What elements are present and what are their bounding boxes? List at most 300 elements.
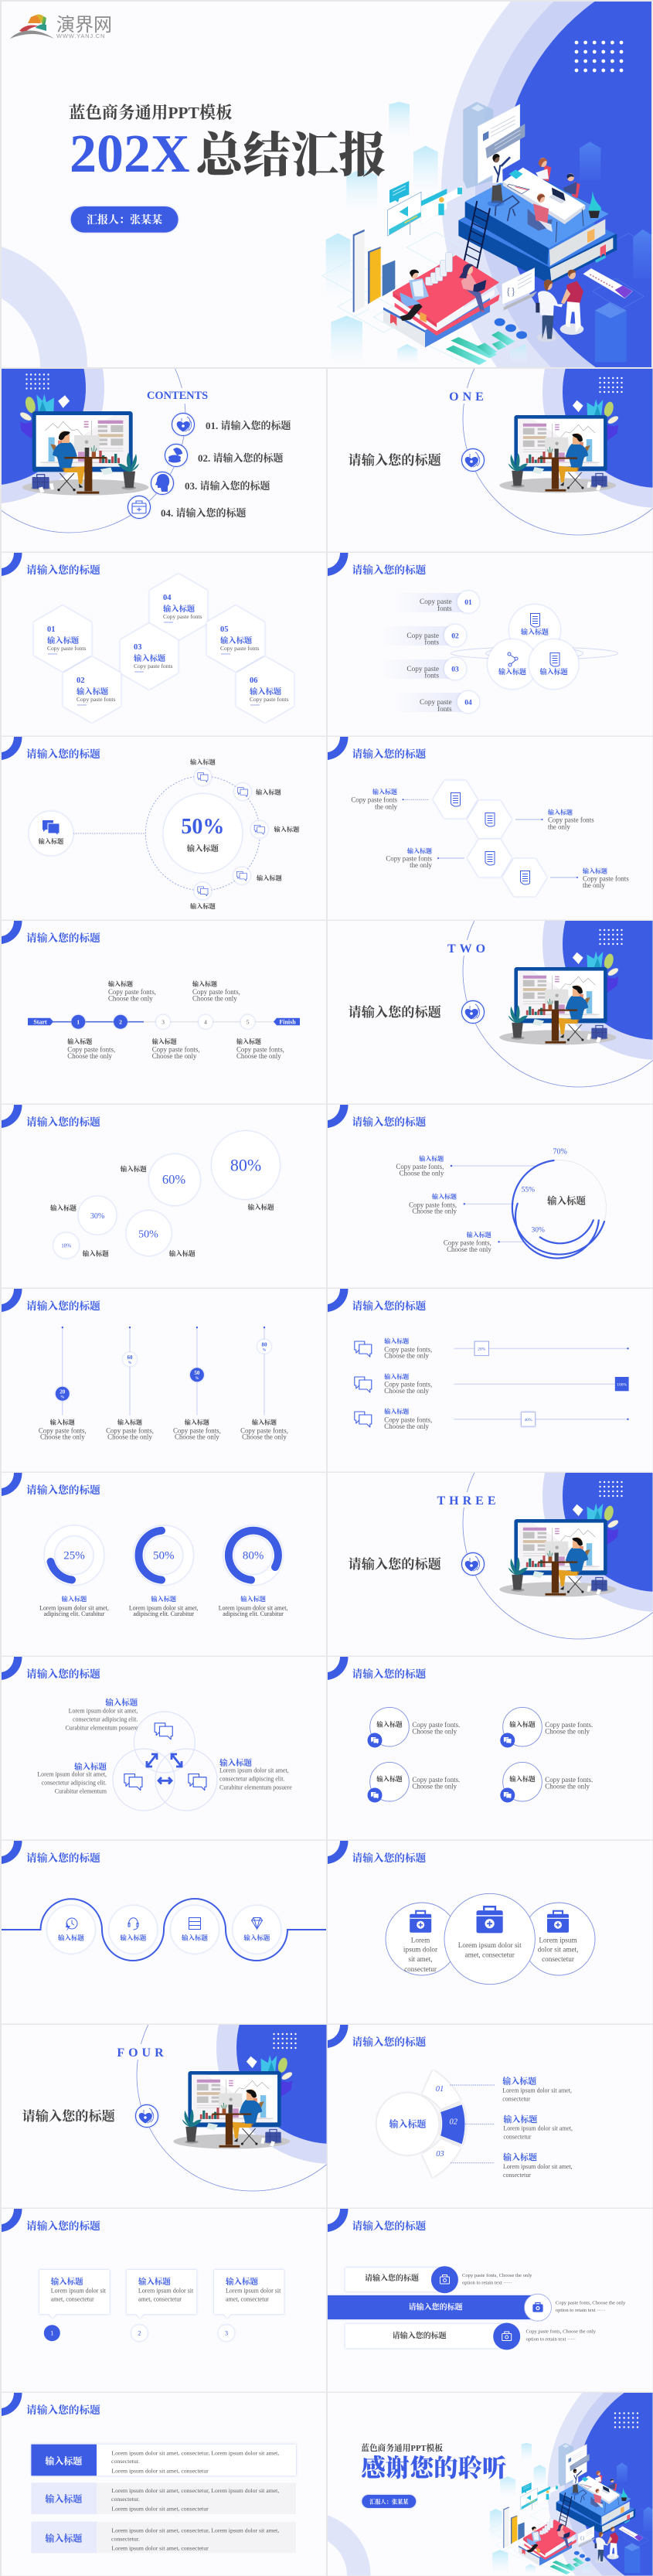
- lower text 1: 输入标题: [67, 1038, 92, 1045]
- slider 80%: [240, 1327, 288, 1441]
- text top: Curabitur elementum posuere: [66, 1725, 138, 1732]
- center circle: 50%: [163, 794, 242, 873]
- text block 70%: 输入标题: [419, 1155, 444, 1163]
- label: ONE: ONE: [449, 390, 488, 404]
- hexagon 04: [151, 575, 206, 639]
- circle right: consectetur: [542, 1955, 574, 1963]
- circle center: [444, 1893, 535, 1985]
- card 3: amet, consectetur: [226, 2296, 269, 2303]
- heading: [2, 921, 100, 944]
- heading: [328, 1289, 427, 1312]
- item bottom right: [500, 1762, 593, 1803]
- step 4: 4: [204, 1019, 207, 1025]
- slider 20%: 输入标题: [50, 1419, 75, 1426]
- center circle: [377, 2093, 439, 2155]
- slide: venn cycle: [2, 1657, 326, 1840]
- card 3: [214, 2270, 284, 2318]
- oval: top: [509, 605, 560, 656]
- slider 60%: 60: [127, 1354, 133, 1361]
- text block 1: [351, 788, 429, 810]
- row 3: Lorem ipsum dolor sit amet, consectetur: [111, 2545, 209, 2552]
- item bottom left: 输入标题: [376, 1775, 403, 1783]
- list item 04: Copy paste: [420, 699, 452, 707]
- step 1: [71, 1015, 85, 1029]
- bubble 50%: 输入标题: [169, 1249, 196, 1257]
- illustration: isometric team on books with blue circles: [2, 2, 651, 367]
- left circle with chat icon: [29, 812, 73, 855]
- node 4: [233, 1906, 281, 1954]
- logo: 演界网: [10, 15, 112, 39]
- lower text 3: Copy paste fonts,: [236, 1045, 284, 1053]
- item bottom left: Copy paste fonts.: [412, 1776, 460, 1784]
- segment 03: 03: [436, 2150, 444, 2159]
- main title: 总结汇报: [196, 130, 386, 182]
- hexagon 03: Copy paste fonts: [134, 663, 172, 670]
- heading: CONTENTS: CONTENTS: [147, 390, 208, 402]
- step 5: 5: [247, 1019, 250, 1025]
- slider 50%: 50: [194, 1370, 200, 1376]
- slider 50%: %: [195, 1377, 199, 1381]
- node 1: [47, 1906, 95, 1954]
- button: reporter: [71, 206, 179, 233]
- oval: left: 输入标题: [498, 667, 526, 676]
- item top right: [500, 1707, 593, 1747]
- heading: [2, 1473, 100, 1496]
- text 01: Lorem ipsum dolor sit amet,: [502, 2087, 572, 2094]
- band 3: option to retain text ·····: [525, 2336, 576, 2342]
- card 1: 输入标题: [51, 2276, 83, 2286]
- slider 20%: Choose the only: [40, 1433, 85, 1441]
- hexagon 02: 输入标题: [77, 687, 109, 697]
- heading: [328, 1841, 427, 1864]
- list item 03: Copy paste: [406, 666, 439, 673]
- main title: 感谢您的聆听: [361, 2454, 506, 2482]
- slide: section THREE: [328, 1380, 653, 1656]
- node upper right: 输入标题: [256, 788, 282, 796]
- list item 02: Copy paste: [406, 632, 439, 640]
- circle right: Lorem ipsum: [539, 1936, 577, 1944]
- item 04: [128, 496, 247, 519]
- node 4: 输入标题: [243, 1934, 270, 1941]
- segment 02: [440, 2104, 465, 2145]
- band 1: Copy paste fonts, Choose the only: [462, 2273, 532, 2278]
- row 2: consectetur.: [111, 2496, 140, 2503]
- slider 60%: Copy paste fonts,: [106, 1426, 154, 1434]
- step 2: 2: [119, 1019, 122, 1025]
- hexagon 05: 05: [220, 625, 229, 634]
- row 2: Lorem ipsum dolor sit amet, consectetur: [111, 2505, 209, 2512]
- heading: 请输入您的标题: [26, 1300, 100, 1312]
- heading: [328, 553, 427, 576]
- donut 50%: Lorem ipsum dolor sit amet,: [129, 1605, 199, 1612]
- text 01: consectetur: [502, 2096, 531, 2103]
- list item 03: [406, 657, 467, 680]
- text top: consectetur adipiscing elit.: [73, 1716, 138, 1723]
- slide: 50% ring: [2, 737, 326, 920]
- icon: heart: [136, 2104, 158, 2128]
- slide: wave: [2, 1841, 326, 2024]
- text top: 输入标题: [105, 1698, 138, 1708]
- band 2: [328, 2294, 626, 2321]
- hexagon 06: 输入标题: [250, 687, 282, 697]
- donut 80%: adipiscing elit. Curabitur: [223, 1610, 284, 1617]
- slide: numbered list with ovals: [328, 553, 652, 736]
- node right: [251, 821, 300, 838]
- row 1: [31, 2445, 296, 2475]
- node lower right: 输入标题: [257, 874, 283, 882]
- hexagon 02: [65, 659, 119, 721]
- text left: consectetur adipiscing elit.: [42, 1780, 107, 1787]
- hexagon 06: Copy paste fonts: [250, 696, 288, 703]
- illustration: section backdrop: [463, 828, 653, 1087]
- hexagon 03: [122, 625, 176, 688]
- step 5: [241, 1015, 255, 1029]
- heading: 请输入您的标题: [352, 2220, 427, 2232]
- bubble 30%: 输入标题: [50, 1205, 77, 1212]
- node bottom: [190, 882, 216, 910]
- lower text 3: Choose the only: [236, 1052, 281, 1060]
- text block 4: the only: [583, 881, 605, 889]
- row 3: consectetur.: [111, 2535, 140, 2542]
- slide: table: [2, 2393, 326, 2576]
- node bottom: 输入标题: [190, 902, 216, 910]
- heading: 请输入您的标题: [26, 748, 100, 760]
- heading: 请输入您的标题: [352, 2036, 427, 2048]
- label: TWO: TWO: [447, 942, 489, 956]
- arc chart: 30%: [532, 1226, 545, 1234]
- step 3: 3: [162, 1019, 165, 1025]
- logo: 演界网: WWW.YANJ.CN: [56, 32, 105, 39]
- row 2: Lorem ipsum dolor sit amet, consectetur, Lorem ipsum dolor sit amet,: [111, 2487, 279, 2494]
- text left: Curabitur elementum: [55, 1787, 107, 1794]
- item bottom right: 输入标题: [509, 1775, 536, 1783]
- slide: concentric arcs: [328, 1105, 652, 1288]
- card 1: amet, consectetur: [51, 2296, 94, 2303]
- logo: 演界网: 演界网: [56, 15, 112, 36]
- circle center: amet, consectetur: [465, 1951, 515, 1959]
- lower text 2: 输入标题: [152, 1038, 177, 1045]
- row 100%: Copy paste fonts,: [384, 1381, 432, 1389]
- upper text 2: Choose the only: [192, 995, 237, 1003]
- text block 2: Copy paste fonts: [548, 816, 594, 824]
- text block 3: the only: [410, 861, 433, 869]
- item 03: 03. 请输入您的标题: [185, 480, 270, 492]
- list item 02: fonts: [424, 639, 439, 646]
- lower text 3: 输入标题: [236, 1038, 261, 1045]
- card 2: 输入标题: [138, 2276, 171, 2286]
- slider 20%: [39, 1327, 87, 1441]
- donut 25%: 25%: [63, 1549, 85, 1562]
- list item 01: fonts: [437, 605, 452, 613]
- row 100%: 100%: [617, 1382, 627, 1387]
- donut 80%: Lorem ipsum dolor sit amet,: [219, 1605, 287, 1612]
- text block 55%: Copy paste fonts,: [409, 1201, 457, 1208]
- slider 20%: Copy paste fonts,: [39, 1426, 87, 1434]
- slider 80%: 80: [261, 1342, 267, 1348]
- row 20%: Choose the only: [384, 1352, 430, 1360]
- lower text 1: Copy paste fonts,: [67, 1045, 115, 1053]
- hexagon 2: [468, 802, 510, 837]
- slide: timeline: [2, 921, 326, 1104]
- hexagon 02: 02: [77, 676, 85, 685]
- row 20%: 输入标题: [384, 1337, 409, 1344]
- arc chart: 55%: [522, 1186, 535, 1194]
- heading: [2, 1105, 100, 1128]
- text 03: Lorem ipsum dolor sit amet,: [503, 2163, 573, 2170]
- text block 4: 输入标题: [583, 867, 607, 874]
- heading: 请输入您的标题: [26, 564, 100, 576]
- node 2: [109, 1906, 157, 1954]
- slide: four circles: [328, 1657, 652, 1840]
- slide: three medical bags: [328, 1841, 652, 2024]
- text left: 输入标题: [74, 1761, 107, 1771]
- card 3: Lorem ipsum dolor sit: [226, 2288, 281, 2295]
- heading: 请输入您的标题: [26, 2404, 100, 2416]
- band 3: Copy paste fonts, Choose the only: [525, 2329, 597, 2335]
- item top left: 输入标题: [376, 1720, 403, 1728]
- card 2: Lorem ipsum dolor sit: [138, 2288, 194, 2295]
- section title: 请输入您的标题: [22, 2108, 115, 2124]
- step 1: 1: [77, 1019, 80, 1025]
- list item 01: Copy paste: [420, 598, 452, 606]
- section title: 请输入您的标题: [348, 1556, 441, 1572]
- segment 02: 02: [450, 2118, 458, 2126]
- marker 3: 3: [225, 2329, 228, 2337]
- row 40%: Copy paste fonts,: [384, 1416, 432, 1423]
- illustration: section backdrop: [462, 369, 652, 535]
- illustration: section backdrop: [137, 1932, 448, 2191]
- slider 80%: 输入标题: [252, 1419, 277, 1426]
- slide: thanks: [243, 2339, 653, 2576]
- icon: heart: [462, 448, 484, 472]
- heading: 请输入您的标题: [26, 1116, 100, 1128]
- heading: 请输入您的标题: [26, 1484, 100, 1496]
- text block 70%: Choose the only: [400, 1169, 444, 1177]
- heading: [2, 1289, 100, 1312]
- text block 1: Copy paste fonts: [351, 796, 398, 804]
- hexagon 02: Copy paste fonts: [77, 696, 115, 703]
- slider 60%: [106, 1327, 154, 1441]
- heading: 请输入您的标题: [352, 1668, 427, 1680]
- text right: Lorem ipsum dolor sit amet,: [219, 1767, 289, 1774]
- heading: 请输入您的标题: [352, 1852, 427, 1864]
- band 1: [345, 2266, 532, 2293]
- band 2: 请输入您的标题: [409, 2302, 463, 2312]
- list item 02: 02: [451, 632, 459, 640]
- dashed ring: [145, 776, 260, 891]
- oval: left: [488, 639, 537, 689]
- circle center: Lorem ipsum dolor sit: [458, 1941, 522, 1949]
- slider 60%: %: [128, 1361, 131, 1365]
- bubble 50%: 50%: [138, 1228, 158, 1240]
- item top left: [368, 1707, 460, 1747]
- donut 50%: 50%: [153, 1549, 174, 1562]
- label: FOUR: FOUR: [117, 2046, 168, 2060]
- text left: Lorem ipsum dolor sit amet,: [37, 1770, 107, 1777]
- bubble 60%: 60%: [162, 1172, 185, 1187]
- node top: 输入标题: [190, 758, 216, 766]
- text block 1: 输入标题: [372, 788, 397, 796]
- donut 25%: [39, 1531, 109, 1617]
- list item 04: [420, 690, 481, 714]
- heading: [2, 2209, 100, 2232]
- section title: 请输入您的标题: [348, 452, 441, 468]
- list item 03: 03: [451, 666, 459, 674]
- card 2: amet, consectetur: [138, 2296, 182, 2303]
- text right: 输入标题: [219, 1757, 252, 1767]
- heading: [2, 2393, 100, 2416]
- item bottom right: Copy paste fonts.: [545, 1776, 593, 1784]
- arrows: cycle: [147, 1754, 182, 1784]
- donut 25%: adipiscing elit. Curabitur: [44, 1610, 105, 1617]
- card 2: [127, 2270, 196, 2318]
- center circle: 50%: 输入标题: [187, 843, 219, 854]
- list item 03: fonts: [424, 671, 439, 680]
- bubble 50%: [127, 1211, 196, 1257]
- button: reporter: 汇报人：张某某: [87, 213, 162, 227]
- heading: [328, 1657, 427, 1680]
- donut 50%: [129, 1531, 199, 1617]
- list item 01: [420, 590, 481, 614]
- bubble 30%: 30%: [90, 1212, 104, 1221]
- heading: [2, 1841, 100, 1864]
- row 1: 输入标题: [45, 2455, 82, 2467]
- heading: [328, 737, 427, 760]
- main title: 202X: [70, 124, 190, 184]
- slide: cover: [2, 2, 651, 367]
- item top right: Choose the only: [545, 1728, 590, 1736]
- heading: [328, 2209, 427, 2232]
- row 3: 输入标题: [45, 2533, 82, 2544]
- donut 80%: [219, 1531, 287, 1617]
- text block 4: [550, 867, 629, 889]
- band 1: option to retain text ·····: [462, 2280, 512, 2285]
- circle left: [386, 1903, 458, 1975]
- hexagon 03: 输入标题: [134, 653, 166, 663]
- item top right: Copy paste fonts.: [545, 1721, 593, 1729]
- section title: 请输入您的标题: [348, 1004, 441, 1020]
- slider 80%: Choose the only: [242, 1433, 287, 1441]
- button: reporter: [362, 2495, 416, 2508]
- slider 50%: [173, 1327, 221, 1441]
- row 3: Lorem ipsum dolor sit amet, consectetur, Lorem ipsum dolor sit amet,: [111, 2527, 279, 2533]
- row 1: Lorem ipsum dolor sit amet, consectetur, Lorem ipsum dolor sit amet,: [111, 2449, 279, 2456]
- hexagon 04: Copy paste fonts: [163, 613, 202, 620]
- text block 70%: Copy paste fonts,: [396, 1163, 444, 1170]
- center circle: 输入标题: [389, 2118, 427, 2130]
- donut 80%: 80%: [243, 1549, 264, 1562]
- text block 1: the only: [375, 802, 398, 810]
- step 4: [199, 1015, 213, 1029]
- slider 60%: Choose the only: [107, 1433, 152, 1441]
- bubble 10%: 10%: [61, 1243, 71, 1249]
- hexagon 03: 03: [134, 643, 142, 652]
- row 1: Lorem ipsum dolor sit amet, consectetur: [111, 2468, 209, 2475]
- label: THREE: THREE: [437, 1494, 500, 1508]
- item 02: 02. 请输入您的标题: [198, 452, 284, 464]
- bubble 80%: 输入标题: [248, 1204, 274, 1211]
- slide: section FOUR: [2, 1932, 448, 2208]
- item 04: 04. 请输入您的标题: [161, 507, 247, 519]
- row 40%: 40%: [524, 1418, 532, 1423]
- hexagon 04: 04: [163, 594, 172, 602]
- timeline track: [28, 1018, 300, 1025]
- subtitle: 蓝色商务通用PPT模板: [69, 103, 233, 122]
- hexagon 05: [209, 608, 263, 670]
- text block 55%: Choose the only: [412, 1208, 457, 1215]
- slider 60%: 输入标题: [117, 1419, 142, 1426]
- text right: Curabitur elementum posuere: [219, 1784, 292, 1791]
- slider 80%: Copy paste fonts,: [240, 1426, 288, 1434]
- donut 80%: 输入标题: [240, 1595, 267, 1603]
- bubble 80%: [212, 1131, 280, 1211]
- slide: horizontal sliders: [328, 1289, 652, 1472]
- lower text 2: Copy paste fonts,: [152, 1045, 200, 1053]
- orbit ellipses: [451, 647, 618, 659]
- button: reporter: 汇报人：张某某: [369, 2499, 409, 2505]
- marker 1: 1: [50, 2329, 53, 2337]
- node 1: 输入标题: [58, 1934, 84, 1941]
- marker 1: [44, 2325, 60, 2341]
- illustration: person at monitor: [19, 394, 148, 496]
- oval: right: [529, 639, 579, 689]
- upper text 2: Copy paste fonts,: [192, 988, 240, 996]
- list item 04: 04: [464, 699, 472, 707]
- item bottom right: Choose the only: [545, 1783, 590, 1791]
- item top left: Copy paste fonts.: [412, 1721, 460, 1729]
- circle left: sit amet,: [408, 1955, 433, 1963]
- row 40%: [355, 1408, 629, 1430]
- slide: percentage bubbles: [2, 1105, 326, 1288]
- arc chart: [451, 1148, 606, 1259]
- heading: [2, 1657, 100, 1680]
- text block 55%: 输入标题: [432, 1193, 457, 1201]
- text block 3: [386, 847, 464, 869]
- oval: top: 输入标题: [521, 628, 549, 635]
- card 1: Lorem ipsum dolor sit: [51, 2288, 107, 2295]
- list item 02: [406, 623, 467, 648]
- hexagon 01: 输入标题: [47, 635, 80, 646]
- slider 20%: 20: [60, 1389, 66, 1395]
- text 02: Lorem ipsum dolor sit amet,: [503, 2125, 573, 2132]
- slide: hexagons: [2, 553, 326, 736]
- slider 50%: Choose the only: [175, 1433, 219, 1441]
- bubble 60%: 输入标题: [121, 1165, 147, 1173]
- item bottom left: [368, 1762, 460, 1803]
- upper text 1: 输入标题: [108, 980, 133, 987]
- band 3: 请输入您的标题: [393, 2330, 447, 2340]
- heading: [2, 553, 100, 576]
- band 2: option to retain text ·····: [556, 2308, 605, 2313]
- heading: 请输入您的标题: [352, 1116, 427, 1128]
- band 3: [345, 2322, 597, 2350]
- lower text 1: Choose the only: [67, 1052, 113, 1060]
- item 02: [165, 444, 284, 467]
- circle left: Lorem: [411, 1936, 430, 1944]
- step 3: [156, 1015, 170, 1029]
- three circles: [113, 1712, 217, 1811]
- text block 30%: Choose the only: [447, 1245, 491, 1253]
- item 03: [151, 472, 270, 495]
- node top: [190, 758, 216, 785]
- row 20%: Copy paste fonts,: [384, 1345, 432, 1353]
- text block 2: 输入标题: [548, 808, 573, 816]
- list item 01: 01: [464, 599, 472, 607]
- hexagon 01: 01: [47, 625, 56, 634]
- wave line: [2, 1899, 326, 1961]
- node 2: 输入标题: [120, 1934, 147, 1941]
- hexagon 1: [434, 782, 476, 817]
